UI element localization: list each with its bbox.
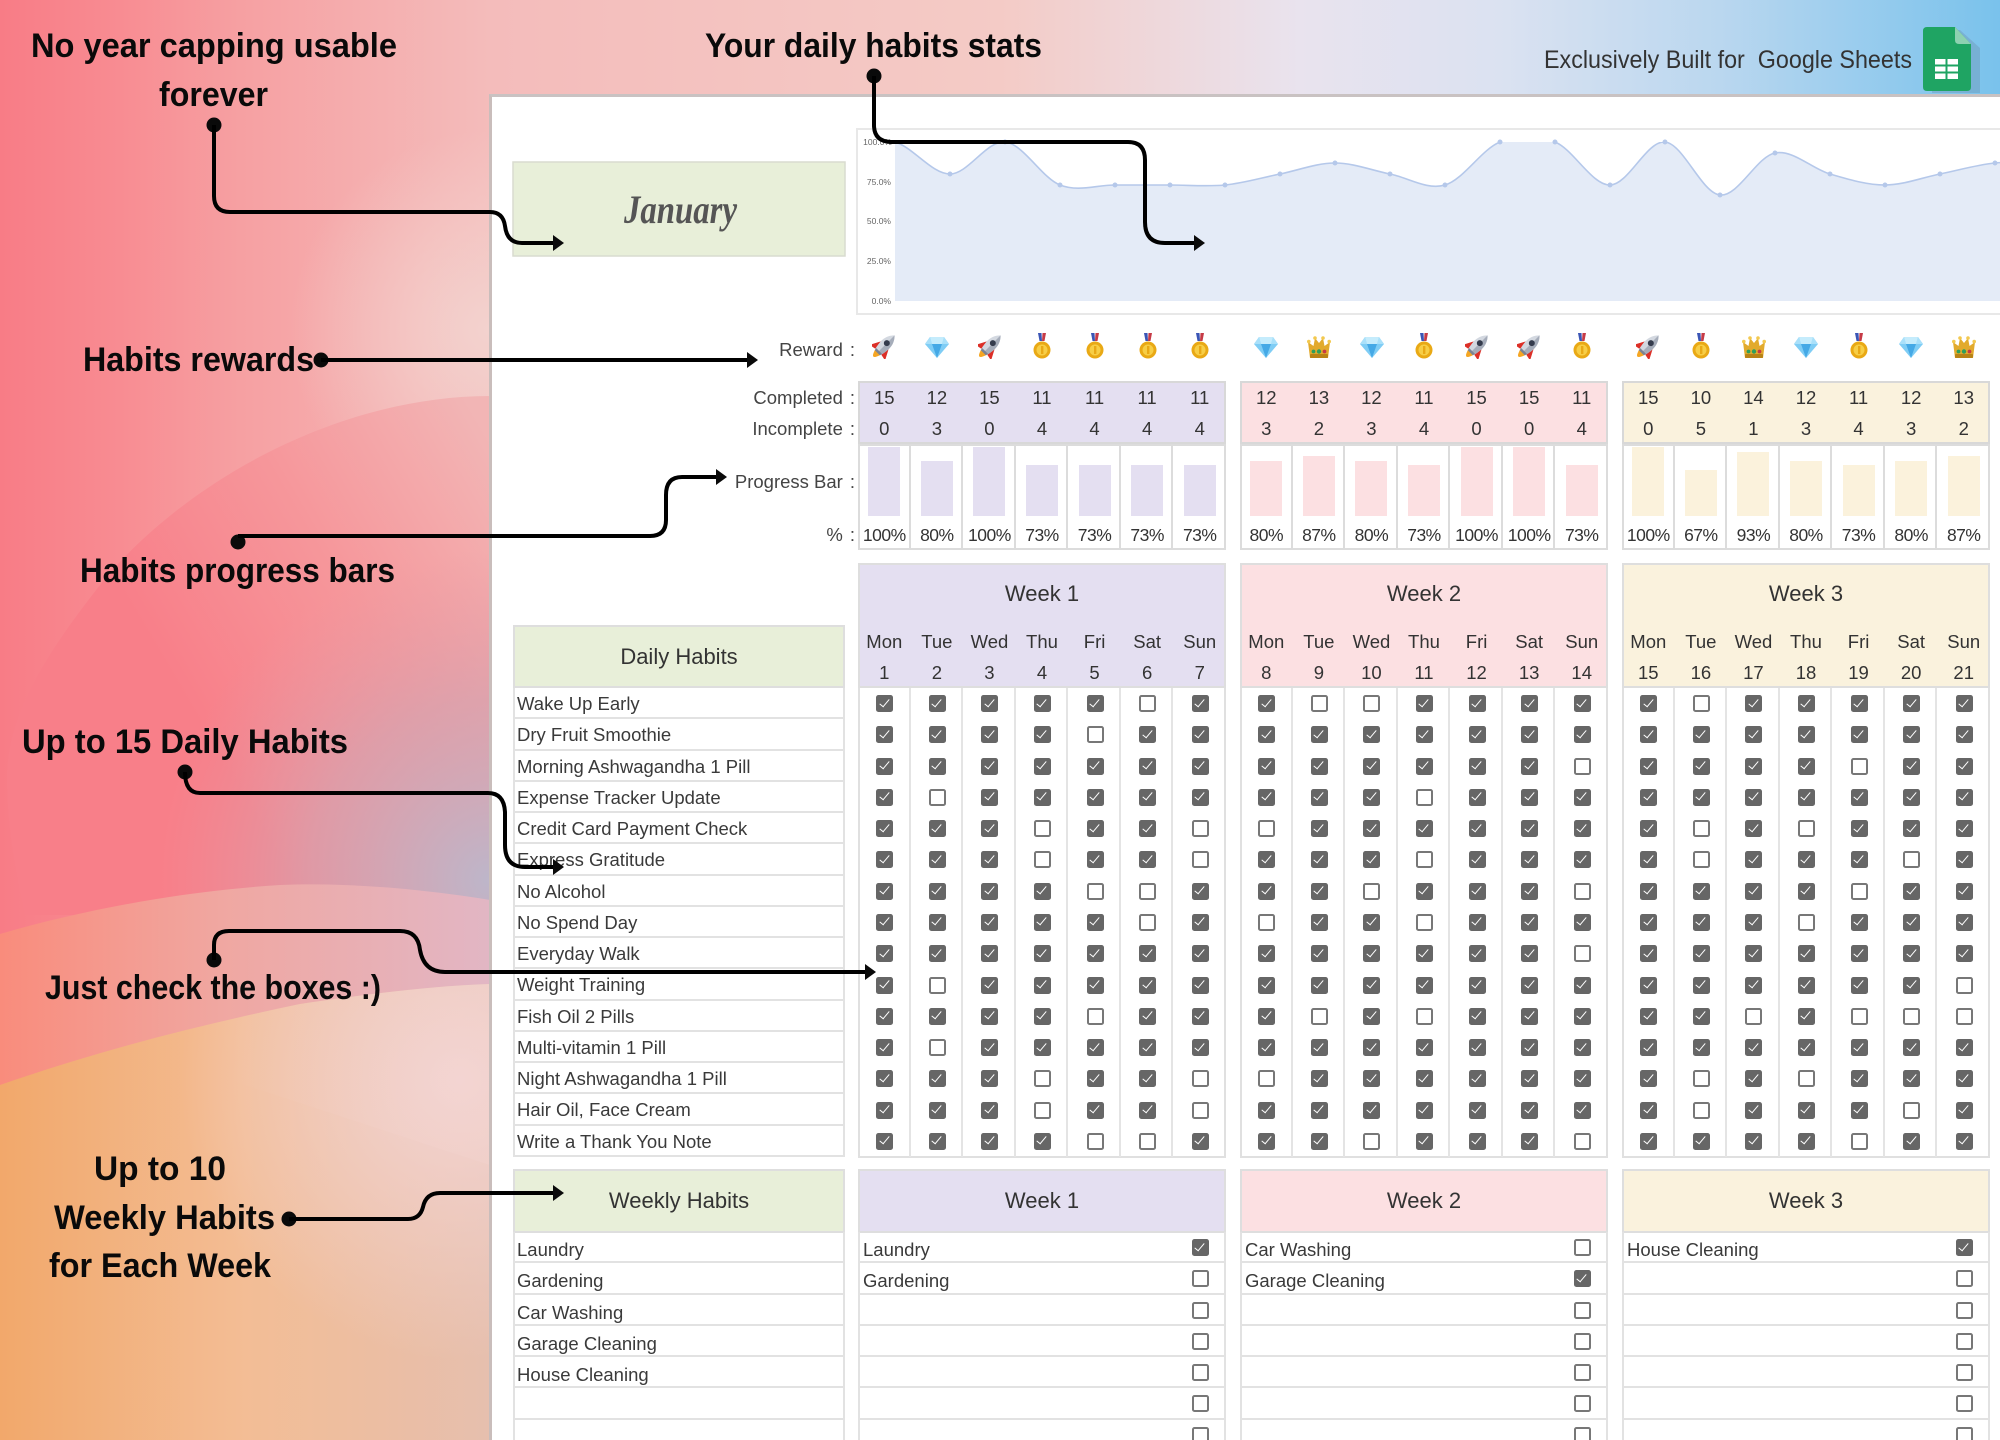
stats: week 2 completed and incomplete counts: 2	[1314, 418, 1324, 439]
chart: daily habit completion area chart: 75.0%	[867, 177, 891, 187]
progress bars: week 3: 73%	[1842, 525, 1875, 545]
progress bars: week 2: 100%	[1508, 525, 1551, 545]
header: week 2 days: 11	[1414, 662, 1434, 683]
row labels: reward, completed, incomplete, progress, percent: % :	[826, 524, 855, 545]
arrow: to chart	[866, 68, 1205, 251]
list: daily habits: Morning Ashwagandha 1 Pill	[517, 756, 750, 777]
list: weekly habits: House Cleaning	[517, 1364, 649, 1385]
stats: week 3 completed and incomplete counts: 3	[1801, 418, 1811, 439]
stats: week 2 completed and incomplete counts: 3	[1366, 418, 1377, 439]
header: weekly habits	[513, 1169, 845, 1233]
header: week 1 days: 5	[1089, 662, 1100, 683]
list: week 1 weekly habits: Gardening	[863, 1270, 949, 1291]
stats: week 2 completed and incomplete counts	[1240, 381, 1608, 444]
progress bars: week 1	[858, 444, 1226, 550]
stats: week 2 completed and incomplete counts: 11	[1572, 387, 1591, 408]
list: daily habits: Dry Fruit Smoothie	[517, 724, 671, 745]
stats: week 3 completed and incomplete counts: 4	[1853, 418, 1864, 439]
header: week 1 days: 4	[1037, 662, 1047, 683]
header: week 2 weekly	[1240, 1169, 1608, 1233]
stats: week 2 completed and incomplete counts: 15	[1519, 387, 1539, 408]
arrow: to weekly habits	[282, 1185, 564, 1226]
stats: week 3 completed and incomplete counts: 11	[1849, 387, 1868, 408]
stats: week 1 completed and incomplete counts: 0	[879, 418, 889, 439]
progress bars: week 1: 80%	[920, 525, 954, 545]
header: week 1 days: Thu	[1026, 631, 1058, 652]
checkbox grid: week 3	[1622, 688, 1990, 1158]
stats: week 2 completed and incomplete counts: 0	[1471, 418, 1482, 439]
stats: week 2 completed and incomplete counts: 3	[1261, 418, 1271, 439]
header: week 1 days: 3	[984, 662, 995, 683]
header: week 2 days: Sat	[1515, 631, 1543, 652]
stats: week 1 completed and incomplete counts: 11	[1085, 387, 1104, 408]
panel: spreadsheet sheet	[489, 94, 2000, 1440]
header: week 3 days: Fri	[1848, 631, 1869, 652]
header: week 1 days: 2	[932, 662, 942, 683]
progress bars: week 1: 73%	[1078, 525, 1111, 545]
progress bars: week 1: 100%	[968, 525, 1011, 545]
header: week 3 days: 15	[1638, 662, 1659, 683]
header: week 1 days: Tue	[921, 631, 952, 652]
stats: week 3 completed and incomplete counts: 3	[1906, 418, 1916, 439]
progress bars: week 2: 80%	[1355, 525, 1388, 545]
list: daily habits: Write a Thank You Note	[517, 1131, 712, 1152]
stats: week 2 completed and incomplete counts: 0	[1524, 418, 1534, 439]
header: week 3 days: 21	[1953, 662, 1974, 683]
stats: week 3 completed and incomplete counts: 2	[1959, 418, 1969, 439]
list: daily habits: Wake Up Early	[517, 693, 640, 714]
header: week 3 days: Sat	[1897, 631, 1925, 652]
callout: up to 10 weekly habits for each week: Up to 10	[94, 1150, 226, 1188]
arrow: to January	[206, 118, 564, 251]
arrow: to progress bars	[230, 469, 727, 550]
stats: week 3 completed and incomplete counts: 15	[1638, 387, 1659, 408]
list: weekly habits	[513, 1232, 845, 1440]
progress bars: week 2: 80%	[1250, 525, 1283, 545]
header: week 1 days: 7	[1195, 662, 1205, 683]
header: week 3 days: Tue	[1685, 631, 1716, 652]
list: daily habits	[513, 688, 845, 1157]
arrow: to rewards	[314, 352, 758, 368]
list: week 3 weekly habits: House Cleaning	[1627, 1239, 1759, 1260]
stats: week 1 completed and incomplete counts: 4	[1037, 418, 1047, 439]
stats: week 1 completed and incomplete counts: 0	[984, 418, 995, 439]
checkbox grid: week 1	[858, 688, 1226, 1158]
stats: week 1 completed and incomplete counts: 11	[1190, 387, 1209, 408]
list: daily habits: Night Ashwagandha 1 Pill	[517, 1068, 727, 1089]
header: week 3 days: Thu	[1790, 631, 1822, 652]
header: week 2 days	[1240, 563, 1608, 688]
stats: week 1 completed and incomplete counts: 11	[1032, 387, 1052, 408]
header: week 1 days: Mon	[866, 631, 902, 652]
stats: week 3 completed and incomplete counts: 12	[1901, 387, 1921, 408]
header: week 2 days: 13	[1519, 662, 1539, 683]
header: week 1 days: Week 1	[1005, 581, 1079, 606]
callout: up to 10 weekly habits for each week	[49, 1150, 275, 1285]
chart: daily habit completion area chart: 100.0%	[863, 137, 892, 147]
header: week 2 days: Wed	[1353, 631, 1390, 652]
callout: no year capping	[31, 27, 397, 114]
header: week 2 days: 12	[1466, 662, 1487, 683]
list: daily habits: Multi-vitamin 1 Pill	[517, 1037, 666, 1058]
stats: week 2 completed and incomplete counts: 12	[1256, 387, 1277, 408]
list: week 2 weekly habits: Garage Cleaning	[1245, 1270, 1385, 1291]
row labels: reward, completed, incomplete, progress, percent: Reward :	[779, 339, 855, 360]
list: weekly habits: Laundry	[517, 1239, 584, 1260]
progress bars: week 3: 100%	[1627, 525, 1670, 545]
progress bars: week 3: 80%	[1894, 525, 1928, 545]
header: week 2 days: 9	[1314, 662, 1324, 683]
progress bars: week 1: 73%	[1025, 525, 1059, 545]
stats: week 1 completed and incomplete counts: 4	[1089, 418, 1100, 439]
stats: week 1 completed and incomplete counts: 11	[1138, 387, 1157, 408]
row labels: reward, completed, incomplete, progress, percent: Progress Bar :	[735, 471, 855, 492]
list: weekly habits: Garage Cleaning	[517, 1333, 657, 1354]
header: week 3 weekly	[1622, 1169, 1990, 1233]
header: week 3 days: 20	[1901, 662, 1921, 683]
header: week 3 days: 18	[1796, 662, 1816, 683]
list: daily habits: Expense Tracker Update	[517, 787, 721, 808]
list: daily habits: No Spend Day	[517, 912, 637, 933]
list: week 2 weekly habits: Car Washing	[1245, 1239, 1351, 1260]
arrow: to daily habits	[178, 764, 564, 875]
stats: week 1 completed and incomplete counts: 4	[1195, 418, 1205, 439]
stats: week 3 completed and incomplete counts: 13	[1953, 387, 1974, 408]
header: week 2 days: Mon	[1248, 631, 1284, 652]
list: daily habits: Everyday Walk	[517, 943, 640, 964]
header: week 2 days: Thu	[1408, 631, 1440, 652]
list: daily habits: Express Gratitude	[517, 849, 665, 870]
stats: week 3 completed and incomplete counts: 0	[1643, 418, 1653, 439]
list: daily habits: Fish Oil 2 Pills	[517, 1006, 634, 1027]
stats: week 3 completed and incomplete counts: 5	[1696, 418, 1706, 439]
header: week 2 days: Fri	[1466, 631, 1487, 652]
row labels: reward, completed, incomplete, progress, percent: Completed :	[753, 387, 855, 408]
arrow: to checkboxes	[206, 931, 876, 980]
row labels: reward, completed, incomplete, progress, percent	[735, 339, 855, 545]
stats: week 1 completed and incomplete counts: 4	[1142, 418, 1152, 439]
stats: week 2 completed and incomplete counts: 12	[1361, 387, 1382, 408]
header: week 1 days: 6	[1142, 662, 1152, 683]
chart: daily habit completion area chart: 0.0%	[872, 296, 891, 306]
progress bars: week 2: 100%	[1455, 525, 1498, 545]
list: weekly habits: Gardening	[517, 1270, 603, 1291]
chart: daily habit completion area chart: 25.0%	[867, 256, 891, 266]
header: week 3 days: 19	[1848, 662, 1869, 683]
panel: January month title: January	[623, 187, 737, 232]
progress bars: week 2: 73%	[1407, 525, 1441, 545]
header: daily habits	[513, 625, 845, 688]
progress bars: week 2: 73%	[1565, 525, 1598, 545]
header: week 2 days: Sun	[1565, 631, 1598, 652]
header: week 2 days: 14	[1571, 662, 1592, 683]
header: week 3 days: Week 3	[1769, 581, 1843, 606]
progress bars: week 3: 87%	[1947, 525, 1980, 545]
stats: week 2 completed and incomplete counts: 15	[1466, 387, 1487, 408]
header: week 1 days: 1	[879, 662, 889, 683]
header: week 3 weekly: Week 3	[1769, 1188, 1843, 1213]
list: daily habits: Weight Training	[517, 974, 645, 995]
stats: week 2 completed and incomplete counts: 4	[1419, 418, 1429, 439]
header: week 2 days: 10	[1361, 662, 1382, 683]
chart: daily habit completion area chart	[856, 128, 2000, 315]
header: week 2 days: Tue	[1303, 631, 1334, 652]
callout: habits progress bars: Habits progress bars	[80, 552, 395, 590]
header: week 3 days	[1622, 563, 1990, 688]
header: week 2 days: Week 2	[1387, 581, 1461, 606]
progress bars: week 1: 100%	[863, 525, 906, 545]
header: week 2 weekly: Week 2	[1387, 1188, 1461, 1213]
callout: habits rewards: Habits rewards	[83, 341, 314, 379]
list: week 1 weekly habits: Laundry	[863, 1239, 930, 1260]
row labels: reward, completed, incomplete, progress, percent: Incomplete :	[752, 418, 855, 439]
progress bars: week 1: 73%	[1130, 525, 1164, 545]
list: daily habits: No Alcohol	[517, 881, 605, 902]
header: week 3 days: 17	[1743, 662, 1764, 683]
stats: week 1 completed and incomplete counts: 3	[932, 418, 942, 439]
list: week 2 weekly habits	[1240, 1232, 1608, 1440]
callout: up to 10 weekly habits for each week: for Each Week	[49, 1247, 271, 1285]
callout: no year capping: No year capping usable	[31, 27, 397, 65]
chart: daily habit completion area chart: 50.0%	[867, 216, 891, 226]
progress bars: week 3: 93%	[1737, 525, 1770, 545]
header: daily habits: Daily Habits	[620, 644, 738, 669]
stats: week 3 completed and incomplete counts: 14	[1743, 387, 1764, 408]
header: week 1 days: Sun	[1183, 631, 1216, 652]
progress bars: week 3: 67%	[1684, 525, 1718, 545]
header: week 1 days	[858, 563, 1226, 688]
list: week 3 weekly habits	[1622, 1232, 1990, 1440]
header: week 2 days: 8	[1261, 662, 1271, 683]
checkbox grid: week 2	[1240, 688, 1608, 1158]
header: week 3 days: 16	[1691, 662, 1711, 683]
callout: exclusively built for Google Sheets: Exclusively Built for Google Sheets	[1544, 46, 1912, 74]
header: weekly habits: Weekly Habits	[609, 1188, 749, 1213]
stats: week 3 completed and incomplete counts: 12	[1796, 387, 1816, 408]
callout: your daily habits stats: Your daily habits stats	[705, 27, 1042, 65]
callout: no year capping: forever	[159, 76, 268, 114]
stats: week 2 completed and incomplete counts: 13	[1309, 387, 1329, 408]
stats: week 1 completed and incomplete counts: 12	[927, 387, 947, 408]
stats: week 1 completed and incomplete counts	[858, 381, 1226, 444]
list: daily habits: Credit Card Payment Check	[517, 818, 747, 839]
stats: week 1 completed and incomplete counts: 15	[979, 387, 1000, 408]
header: week 3 days: Mon	[1630, 631, 1666, 652]
list: weekly habits: Car Washing	[517, 1302, 623, 1323]
header: week 1 days: Sat	[1133, 631, 1161, 652]
list: week 1 weekly habits	[858, 1232, 1226, 1440]
callout: up to 15 daily habits: Up to 15 Daily Habits	[22, 723, 348, 761]
stats: week 3 completed and incomplete counts	[1622, 381, 1990, 444]
stats: week 3 completed and incomplete counts: 1	[1748, 418, 1759, 439]
stats: week 3 completed and incomplete counts: 10	[1691, 387, 1711, 408]
header: week 1 weekly	[858, 1169, 1226, 1233]
list: daily habits: Hair Oil, Face Cream	[517, 1099, 691, 1120]
stats: week 2 completed and incomplete counts: 11	[1414, 387, 1434, 408]
header: week 3 days: Wed	[1735, 631, 1772, 652]
progress bars: week 3: 80%	[1789, 525, 1823, 545]
stats: week 2 completed and incomplete counts: 4	[1577, 418, 1587, 439]
header: week 1 weekly: Week 1	[1005, 1188, 1079, 1213]
header: week 3 days: Sun	[1947, 631, 1980, 652]
progress bars: week 1: 73%	[1183, 525, 1216, 545]
callout: just check the boxes: Just check the boxes :)	[45, 969, 381, 1007]
progress bars: week 3	[1622, 444, 1990, 550]
progress bars: week 2: 87%	[1302, 525, 1336, 545]
callout: up to 10 weekly habits for each week: Weekly Habits	[54, 1199, 275, 1237]
header: week 1 days: Wed	[971, 631, 1008, 652]
stats: week 1 completed and incomplete counts: 15	[874, 387, 895, 408]
progress bars: week 2	[1240, 444, 1608, 550]
icon: Google Sheets	[1923, 27, 1980, 93]
header: week 1 days: Fri	[1084, 631, 1105, 652]
